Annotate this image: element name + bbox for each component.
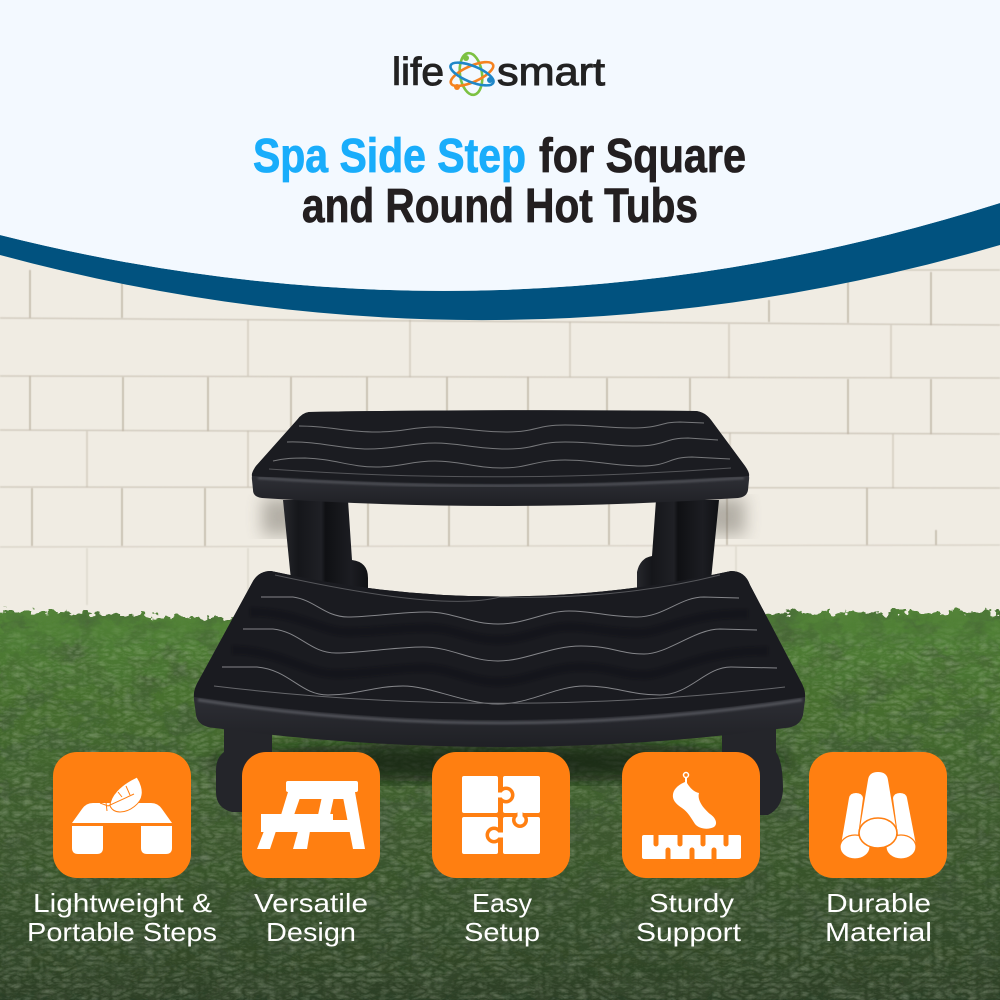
label: durable material: Durable bbox=[826, 888, 931, 918]
background: grass lawn bbox=[0, 600, 1000, 1000]
label: sturdy support bbox=[636, 888, 742, 947]
label: easy setup: Easy bbox=[472, 888, 532, 918]
label: durable material bbox=[825, 888, 932, 947]
label: versatile: Versatile bbox=[254, 888, 368, 918]
icon tile: picnic table bbox=[242, 752, 380, 878]
label: easy setup bbox=[464, 888, 540, 947]
label: sturdy support: Support bbox=[636, 917, 742, 947]
feature: easy setup bbox=[432, 752, 570, 947]
icon tile: stacked pipes bbox=[809, 752, 947, 878]
upper tread bbox=[252, 410, 749, 506]
label: sturdy support: Sturdy bbox=[649, 888, 734, 918]
title line 2: and Round Hot Tubs bbox=[302, 180, 698, 233]
label: easy setup: Setup bbox=[464, 917, 540, 947]
icon tile: foot on ruler bbox=[622, 752, 760, 878]
label: versatile: Design bbox=[266, 917, 356, 947]
header panel with curved band bbox=[0, 0, 1000, 320]
logo wordmark: smart: smart bbox=[497, 51, 605, 94]
label: lightweight: Portable Steps bbox=[27, 917, 217, 947]
background: brick wall bbox=[0, 200, 1000, 630]
lower right leg bbox=[722, 725, 783, 815]
icon tile: lightweight step with feather bbox=[53, 752, 191, 878]
feature: sturdy support bbox=[622, 752, 760, 947]
upper left leg bbox=[283, 500, 368, 600]
feature: lightweight bbox=[27, 752, 217, 947]
product: spa side step bbox=[194, 410, 805, 815]
label: durable material: Material bbox=[825, 917, 932, 947]
logo: lifesmart bbox=[392, 51, 605, 96]
label: lightweight bbox=[27, 888, 217, 947]
label: versatile bbox=[254, 888, 368, 947]
step shadows on wall and grass bbox=[210, 498, 790, 782]
logo wordmark: life: life bbox=[392, 51, 444, 94]
title line 1 highlight: Spa Side Step bbox=[253, 130, 526, 183]
logo atom icon bbox=[448, 52, 496, 96]
title line 1 rest: for Square bbox=[539, 130, 746, 183]
upper right leg bbox=[637, 500, 719, 600]
lower left leg bbox=[216, 725, 272, 812]
light header background bbox=[0, 0, 1000, 291]
feature: versatile bbox=[242, 752, 380, 947]
title bbox=[253, 130, 746, 233]
curved blue band bbox=[0, 203, 1000, 320]
feature: durable material bbox=[809, 752, 947, 947]
label: lightweight: Lightweight & bbox=[33, 888, 212, 918]
lower tread bbox=[194, 571, 805, 747]
icon tile: puzzle pieces bbox=[432, 752, 570, 878]
